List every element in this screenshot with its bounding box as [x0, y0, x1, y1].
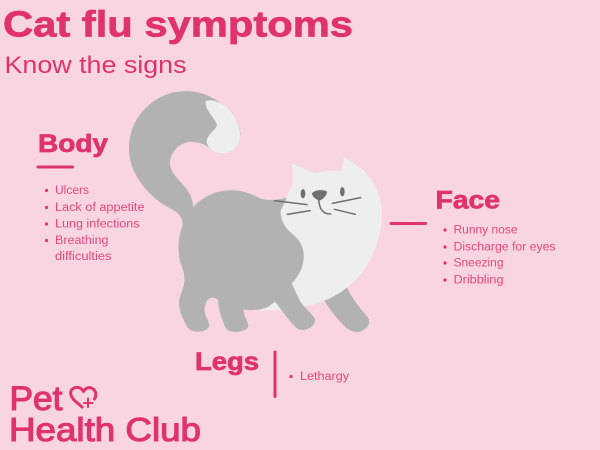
- body section: [36, 130, 144, 263]
- face section: [390, 186, 556, 286]
- legs section: [195, 348, 349, 398]
- face list: Runny nose: [454, 224, 518, 236]
- cat left eye: [301, 189, 305, 198]
- title: Cat flu symptoms: [3, 4, 353, 44]
- cat tail tip: [206, 100, 240, 153]
- logo: Pet Health Club: [9, 380, 201, 448]
- face list: [443, 224, 556, 286]
- body divider: [36, 166, 74, 168]
- face list: Dribbling: [454, 274, 504, 286]
- body list: Breathing: [55, 235, 108, 247]
- cat far leg: [324, 287, 369, 332]
- body list: [45, 185, 144, 263]
- cat white body and head: [253, 157, 382, 310]
- face list: Sneezing: [454, 258, 504, 270]
- body heading: Body: [38, 130, 108, 158]
- cat illustration: [129, 91, 382, 332]
- legs heading: Legs: [195, 348, 259, 376]
- legs divider: [274, 350, 276, 398]
- cat nose and mouth: [312, 190, 331, 214]
- cat whiskers: [275, 198, 361, 214]
- face connector: [390, 222, 427, 225]
- face list: Discharge for eyes: [454, 242, 556, 254]
- body list: Lack of appetite: [55, 202, 144, 214]
- cat right eye: [340, 187, 345, 196]
- logo wordmark: Pet: [10, 380, 63, 418]
- face heading: Face: [436, 186, 500, 214]
- legs list: Lethargy: [300, 371, 349, 383]
- body list: difficulties: [55, 251, 112, 263]
- logo: Pet Health Club: Health Club: [9, 411, 201, 448]
- body list: Ulcers: [55, 185, 89, 197]
- cat grey body and tail: [129, 91, 315, 332]
- subtitle: Know the signs: [4, 52, 186, 79]
- body list: Lung infections: [55, 218, 140, 230]
- icon: heart with plus: [71, 387, 96, 407]
